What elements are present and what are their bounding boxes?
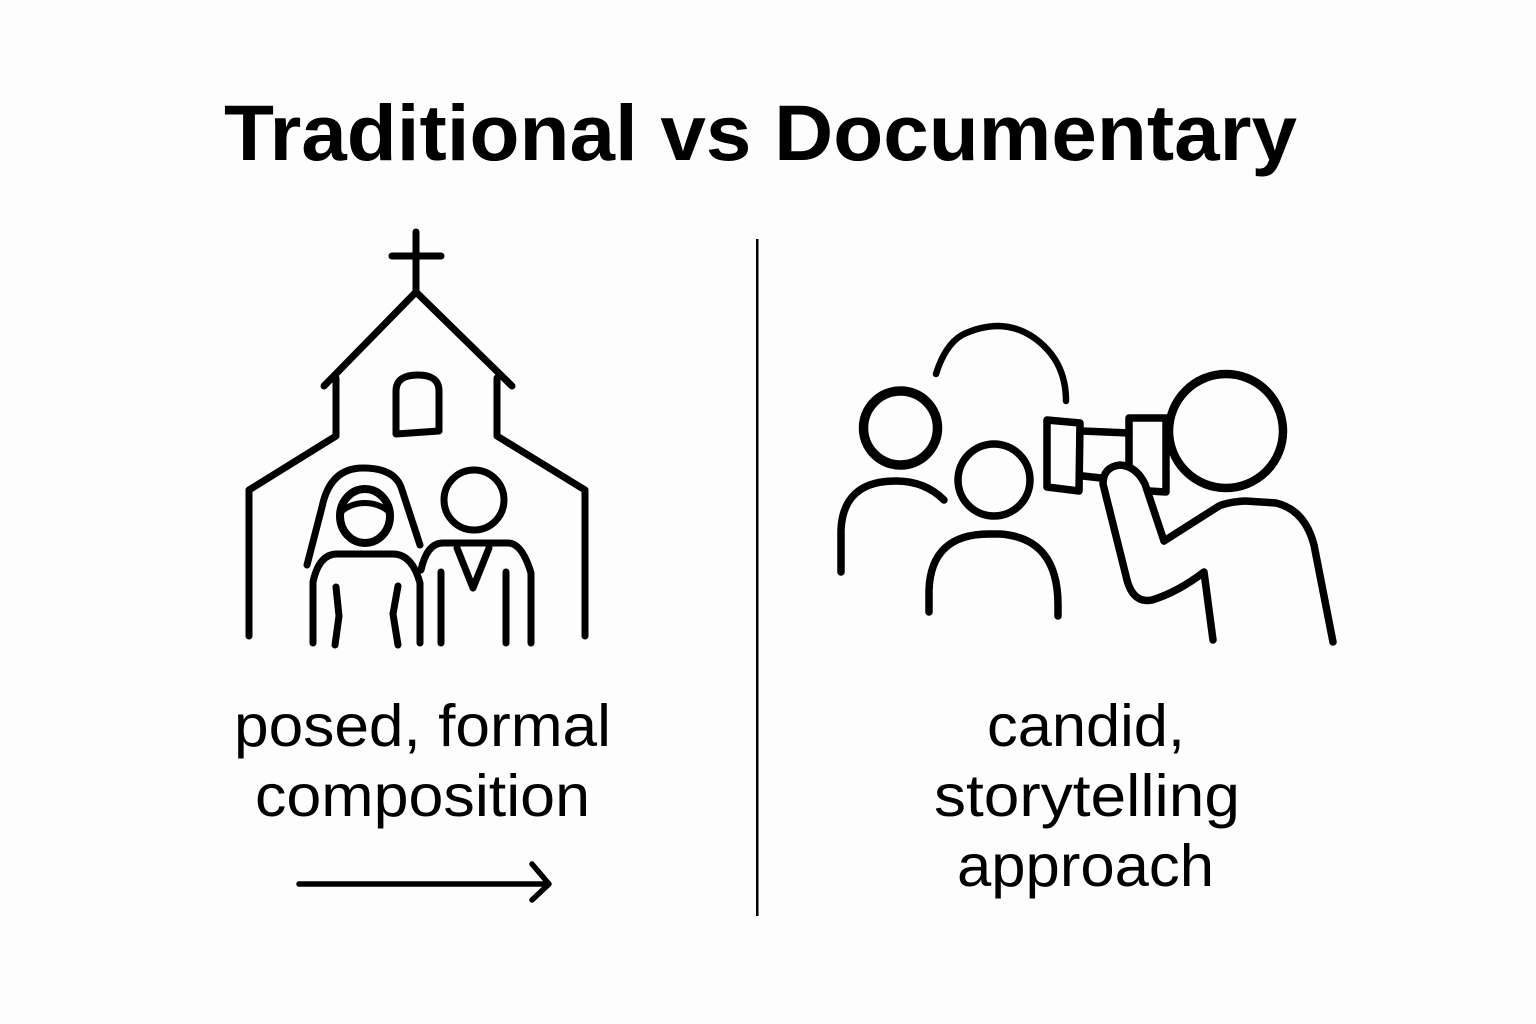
photographer bbox=[1103, 374, 1333, 642]
caption: documentary: storytelling bbox=[934, 763, 1240, 829]
icon: photographer and guests bbox=[841, 326, 1333, 642]
caption: traditional bbox=[234, 693, 611, 829]
icon: church with couple bbox=[249, 232, 585, 645]
guest centre bbox=[929, 444, 1058, 616]
caption: documentary: candid, bbox=[987, 693, 1185, 759]
caption: traditional: composition bbox=[255, 763, 590, 829]
bride bbox=[307, 468, 420, 645]
guest left bbox=[841, 391, 944, 572]
church building bbox=[249, 232, 585, 636]
caption: documentary bbox=[934, 693, 1240, 899]
title: Traditional vs Documentary bbox=[224, 88, 1297, 177]
arrow bbox=[299, 864, 549, 900]
guest arc bbox=[936, 326, 1066, 401]
groom bbox=[421, 470, 531, 643]
caption: traditional: posed, formal bbox=[234, 693, 611, 759]
caption: documentary: approach bbox=[957, 833, 1214, 899]
panel: documentary bbox=[841, 326, 1333, 899]
panel: traditional bbox=[234, 232, 611, 900]
camera bbox=[1047, 418, 1166, 492]
